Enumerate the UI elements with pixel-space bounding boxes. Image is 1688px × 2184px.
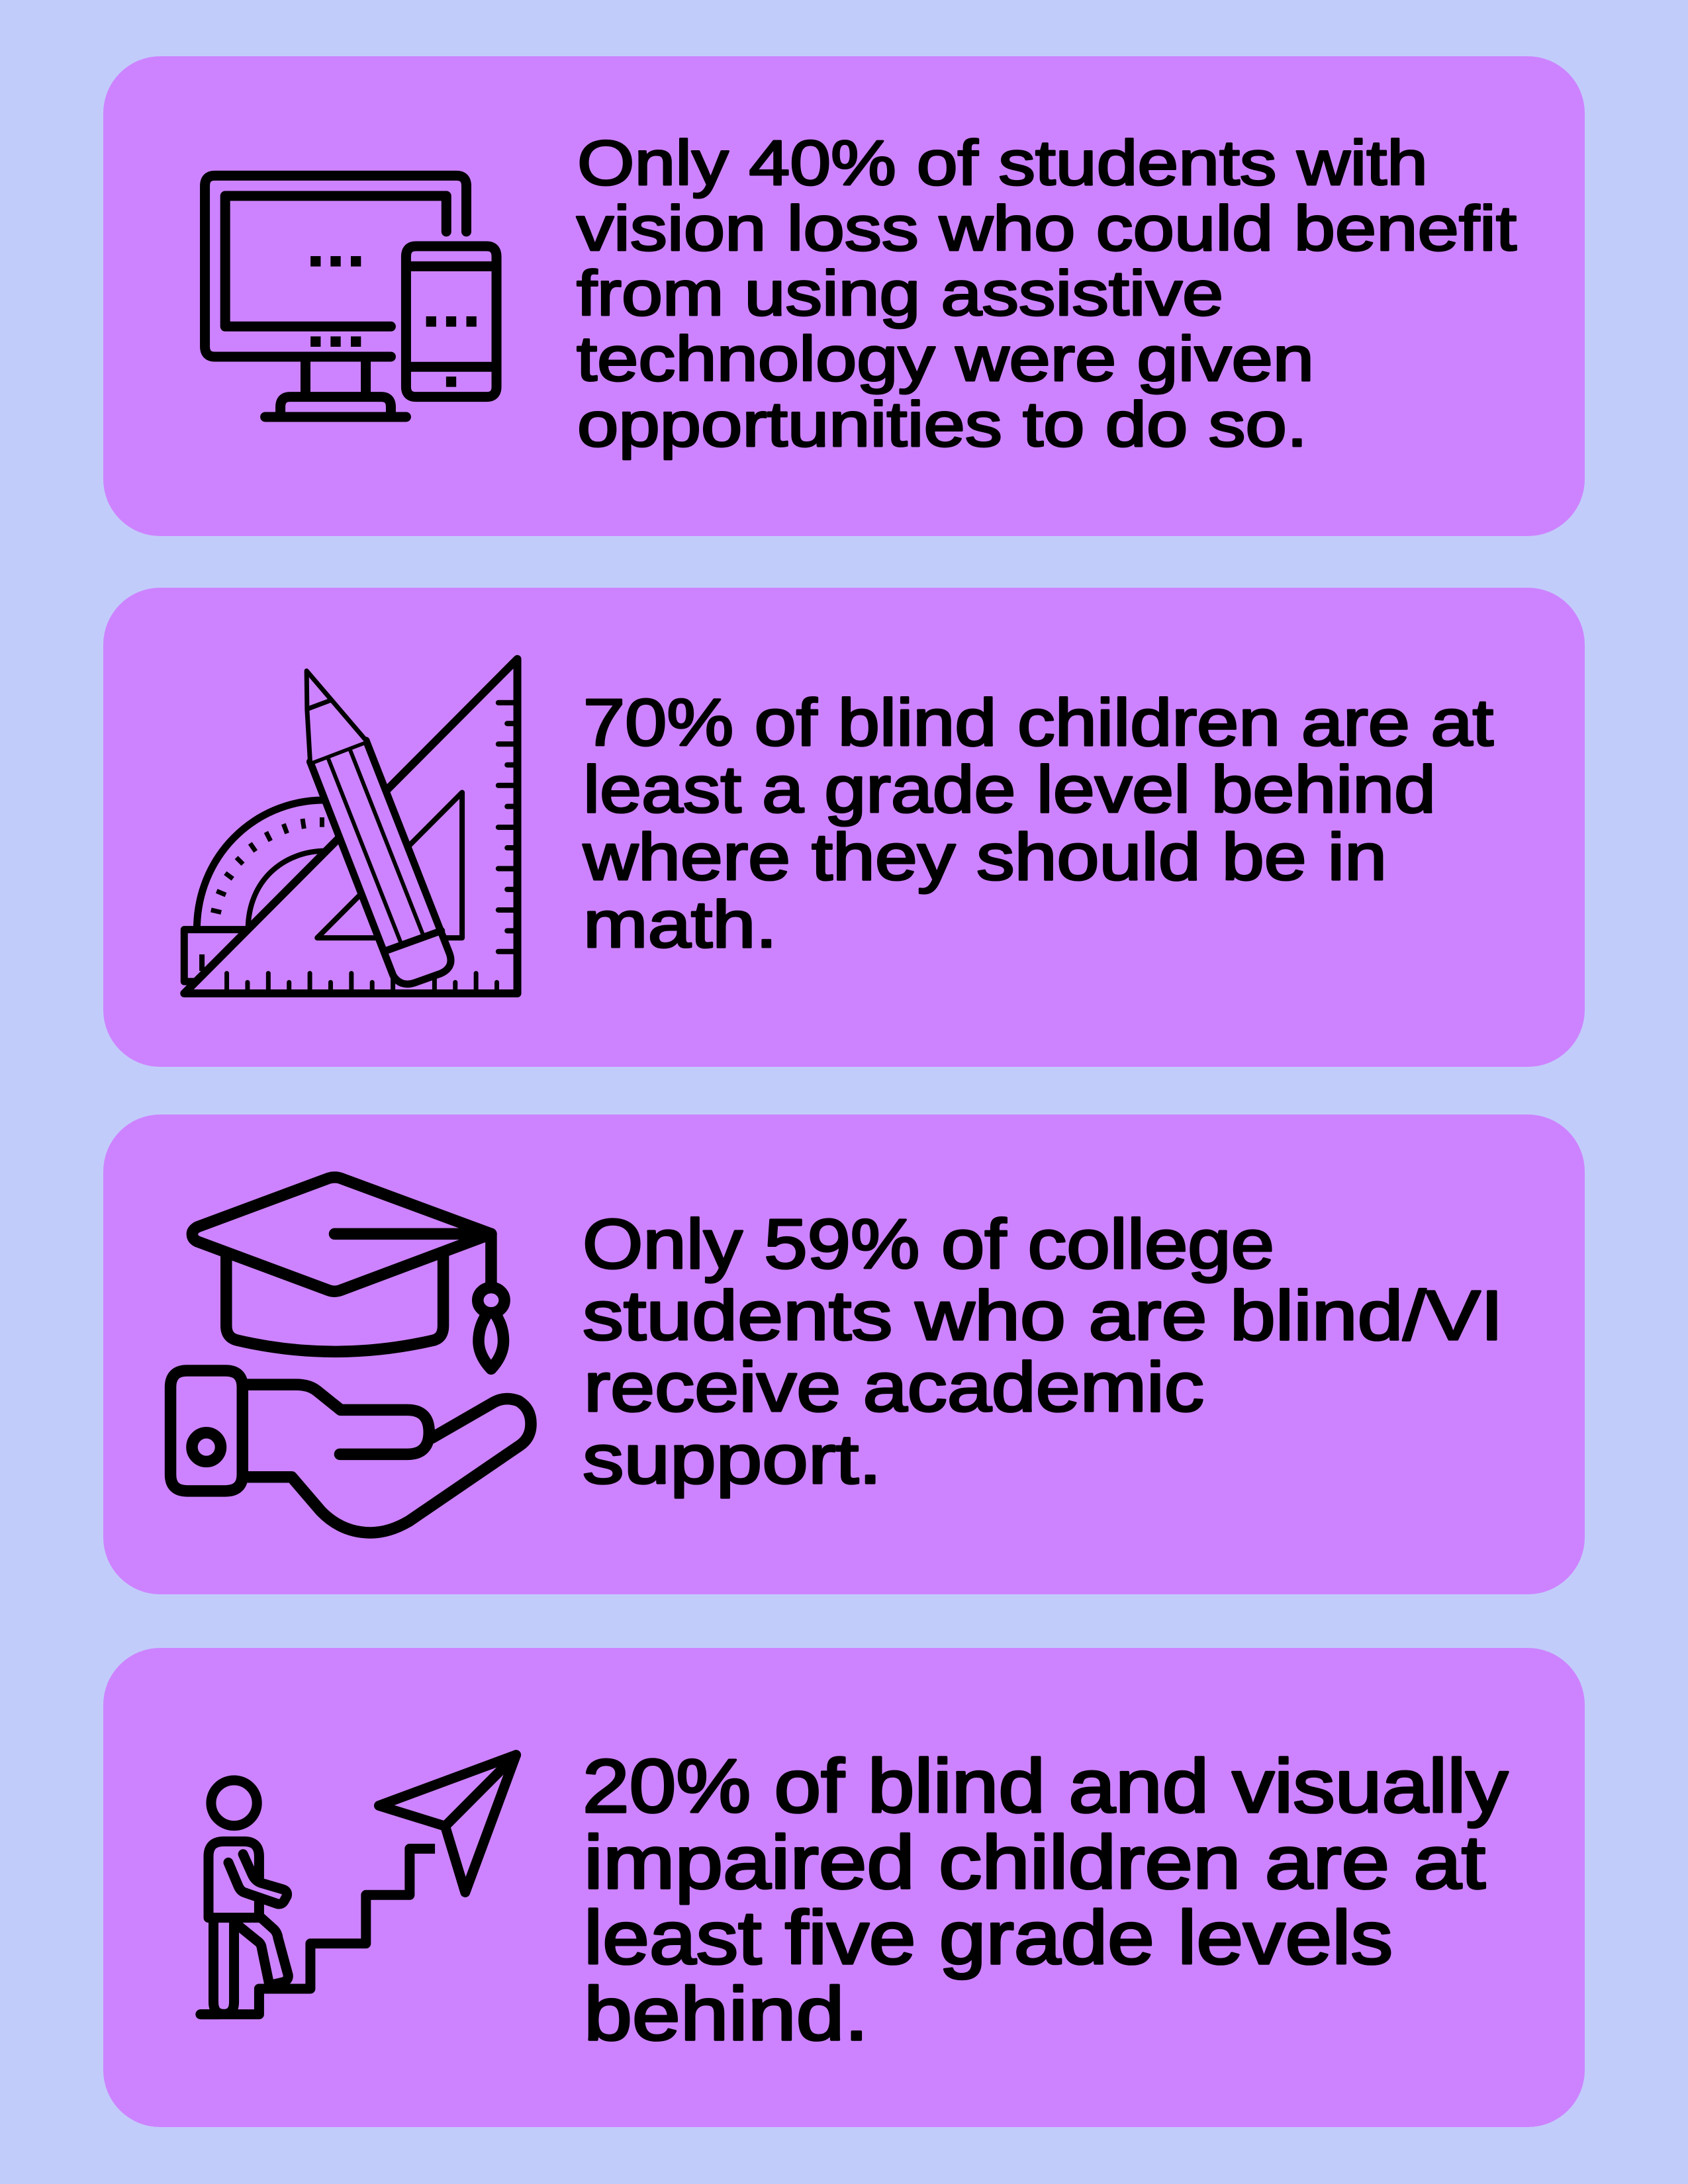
text: 70% statistic: where they should be in bbox=[583, 820, 1387, 894]
text: 20% statistic bbox=[583, 1745, 1508, 2056]
icon: graduation cap over hand bbox=[171, 1177, 531, 1533]
text: 40% statistic: technology were given bbox=[577, 324, 1314, 394]
card background 1 bbox=[103, 56, 1585, 536]
text: 40% statistic: opportunities to do so. bbox=[577, 389, 1307, 460]
card background 4 bbox=[103, 1648, 1585, 2127]
text: 40% statistic bbox=[577, 128, 1517, 460]
pencil bbox=[306, 671, 451, 984]
text: 20% statistic: least five grade levels bbox=[584, 1896, 1393, 1980]
text: 59% statistic: Only 59% of college bbox=[583, 1205, 1274, 1283]
panel: five grade levels behind bbox=[103, 1648, 1585, 2127]
text: 59% statistic: students who are blind/VI bbox=[583, 1277, 1503, 1355]
text: 70% statistic: math. bbox=[583, 887, 777, 962]
text: 40% statistic: vision loss who could benefit bbox=[577, 193, 1517, 264]
text: 40% statistic: Only 40% of students with bbox=[577, 128, 1428, 199]
text: 20% statistic: behind. bbox=[584, 1972, 868, 2056]
icon: monitor and phone bbox=[205, 175, 496, 417]
text: 70% statistic: 70% of blind children are at bbox=[583, 686, 1493, 760]
icon: person climbing stairs to paper plane bbox=[201, 1755, 516, 2015]
card background 2 bbox=[103, 588, 1585, 1067]
panel: math grade level bbox=[103, 588, 1585, 1067]
text: 40% statistic: from using assistive bbox=[577, 258, 1223, 329]
panel: college academic support bbox=[103, 1115, 1585, 1594]
card background 3 bbox=[103, 1115, 1585, 1594]
text: 59% statistic: support. bbox=[583, 1420, 882, 1498]
text: 59% statistic: receive academic bbox=[584, 1348, 1204, 1426]
panel: assistive technology bbox=[103, 56, 1585, 536]
text: 20% statistic: 20% of blind and visually bbox=[583, 1745, 1508, 1829]
icon: pencil, protractor and set square bbox=[184, 659, 518, 993]
text: 59% statistic bbox=[583, 1205, 1503, 1498]
text: 20% statistic: impaired children are at bbox=[584, 1821, 1485, 1905]
text: 70% statistic bbox=[583, 686, 1493, 962]
text: 70% statistic: least a grade level behind bbox=[583, 752, 1436, 827]
